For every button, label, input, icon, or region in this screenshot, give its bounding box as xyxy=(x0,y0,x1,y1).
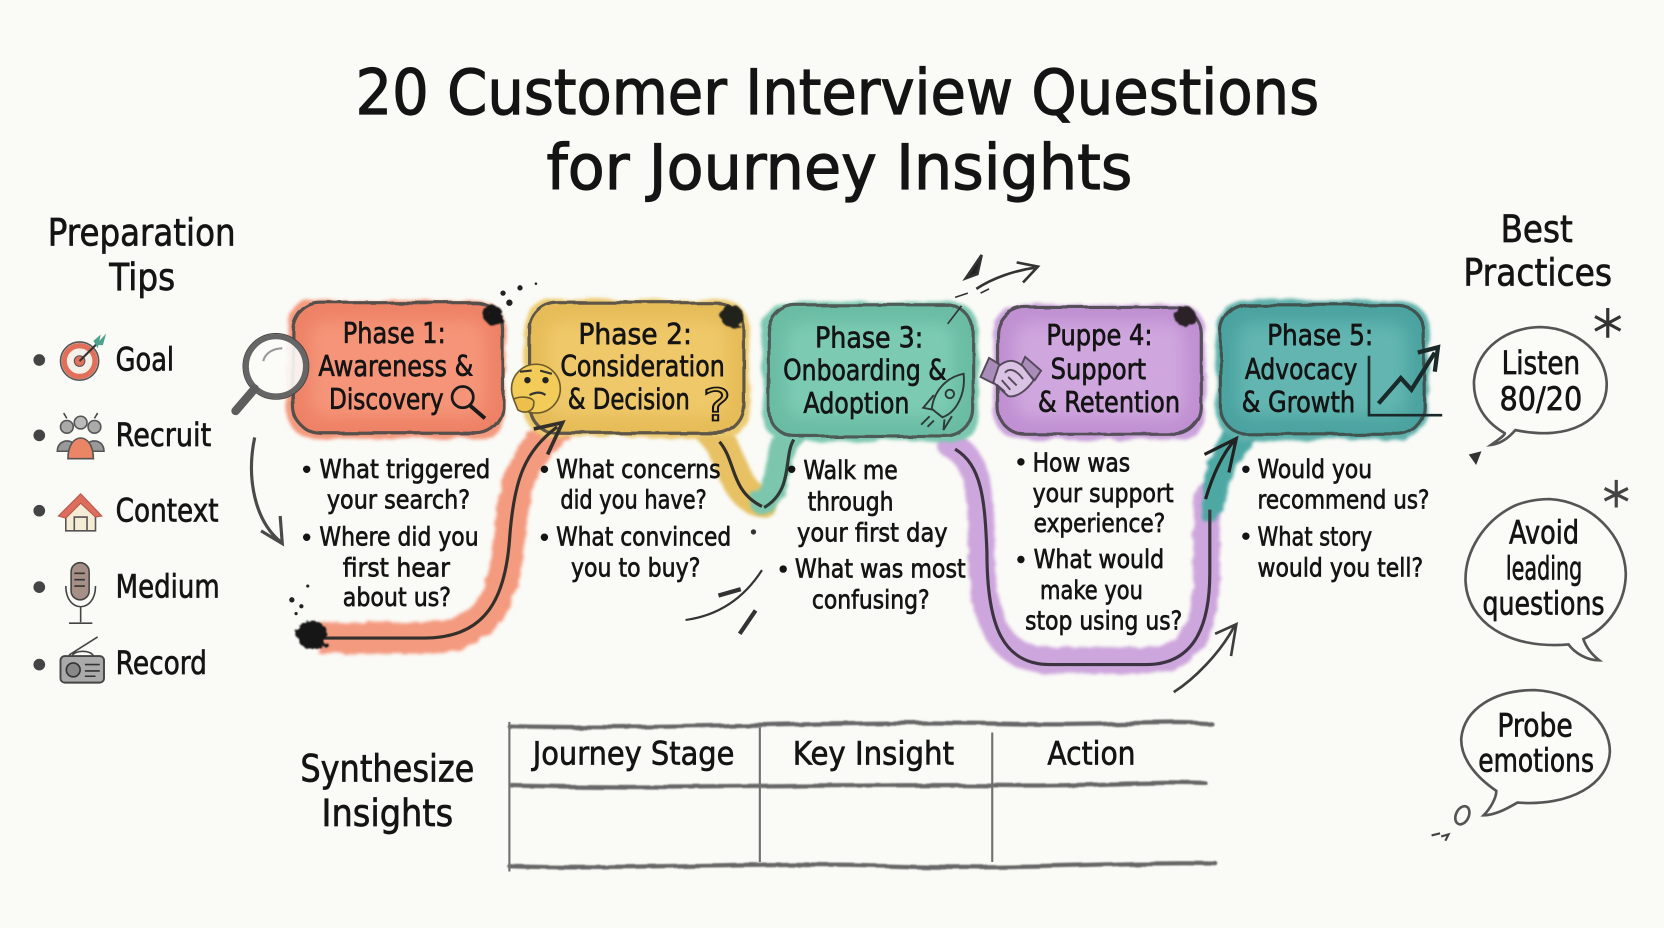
phase 3 panel xyxy=(762,302,978,442)
journey line: orange ribbon ink with arrowhead xyxy=(310,423,562,638)
heading: synthesize insights xyxy=(300,747,474,835)
questions: phase 1: your search? xyxy=(327,486,470,516)
panel: preparation tips xyxy=(33,211,236,683)
ribbon: orange xyxy=(318,425,562,638)
callout: avoid leading questions: leading xyxy=(1506,550,1582,588)
title xyxy=(356,56,1319,204)
questions: phase 4: experience? xyxy=(1034,509,1165,539)
phase 4 panel: Support xyxy=(1051,352,1146,386)
tip: medium: Medium xyxy=(116,568,220,606)
panel: best practices xyxy=(1432,208,1628,841)
heading: best practices xyxy=(1463,208,1612,295)
heading: best practices: Practices xyxy=(1463,252,1612,295)
arrow: upper sketch xyxy=(948,255,1038,324)
table: synthesis grid: Key Insight xyxy=(793,734,954,772)
tip: record: Record xyxy=(116,644,207,682)
phase 5 panel: & Growth xyxy=(1242,385,1355,419)
questions: phase 1: about us? xyxy=(343,583,451,613)
icon: small magnifier xyxy=(452,387,485,418)
questions: phase 5 xyxy=(1242,455,1429,583)
tip: recruit: Recruit xyxy=(116,416,211,454)
phase 2 panel: & Decision xyxy=(568,382,690,416)
phase 5 panel: Advocacy xyxy=(1245,352,1357,386)
questions: phase 4: make you xyxy=(1040,576,1143,606)
journey line: yellow ribbon ink xyxy=(720,442,762,506)
questions: phase 5: would you tell? xyxy=(1258,553,1423,583)
phase 5 panel: Phase 5: xyxy=(1267,318,1373,352)
tip: context: Context xyxy=(116,491,219,529)
tip: context xyxy=(33,491,219,531)
questions: phase 2 xyxy=(541,455,731,583)
questions: phase 1: What triggered xyxy=(319,455,490,485)
journey ribbons: colour wash xyxy=(318,425,1268,660)
ribbon: purple xyxy=(950,444,1207,660)
callout: avoid leading questions xyxy=(1466,480,1628,660)
questions: phase 3 xyxy=(779,456,966,615)
callout: listen: Listen xyxy=(1502,344,1580,382)
tip: recruit xyxy=(33,413,211,459)
callout: avoid leading questions: Avoid xyxy=(1509,514,1579,552)
callout: probe emotions: emotions xyxy=(1478,742,1594,780)
journey line: arrow into phase 5 xyxy=(1204,439,1236,499)
questions: phase 4 xyxy=(1017,448,1182,637)
questions: phase 2: did you have? xyxy=(560,486,707,516)
phase 3 panel: Phase 3: xyxy=(815,320,923,354)
phase 4 panel xyxy=(993,304,1206,440)
phase 4 panel: Puppe 4: xyxy=(1046,318,1152,352)
phase 1 panel: Phase 1: xyxy=(343,316,446,350)
phase 3 panel: Onboarding & xyxy=(783,353,947,387)
questions: phase 4: your support xyxy=(1033,479,1174,509)
callout: avoid leading questions: questions xyxy=(1483,585,1605,623)
journey line: teal ribbon ink xyxy=(764,440,794,508)
arrow: lower sketch xyxy=(686,530,762,634)
ribbon: yellow xyxy=(709,429,762,501)
icon: thinking face xyxy=(512,364,560,413)
callout: probe emotions: Probe xyxy=(1497,707,1573,745)
phase 4 panel: & Retention xyxy=(1038,385,1180,419)
icon: growth chart xyxy=(1369,347,1442,415)
ink blob xyxy=(289,584,328,649)
questions: phase 3: Walk me xyxy=(803,456,898,486)
questions: phase 3: your first day xyxy=(797,518,948,548)
heading: best practices: Best xyxy=(1501,208,1573,251)
ribbon: teal xyxy=(762,433,794,501)
arrow: tips to phase 1 xyxy=(252,437,282,544)
questions: phase 1 xyxy=(303,455,490,613)
heading: preparation tips: Preparation xyxy=(48,211,236,254)
heading: preparation tips xyxy=(48,211,236,299)
callout: listen xyxy=(1469,308,1620,465)
icon: rocket xyxy=(921,374,964,430)
questions: phase 3: through xyxy=(808,488,894,518)
phase 2 panel: Phase 2: xyxy=(578,317,692,351)
callout: listen: 80/20 xyxy=(1500,380,1582,418)
tip: goal xyxy=(33,333,174,380)
phase 3 panel: Adoption xyxy=(803,386,909,420)
questions: phase 4: What would xyxy=(1034,545,1164,575)
table: synthesis grid: Journey Stage xyxy=(531,734,734,772)
questions: phase 2: What convinced xyxy=(556,523,731,553)
table: synthesis grid xyxy=(509,722,1216,872)
phase 2 panel xyxy=(524,300,749,437)
phase 1 panel: Discovery xyxy=(329,382,444,416)
questions: phase 1: Where did you xyxy=(319,523,479,553)
phase 5 panel xyxy=(1216,301,1442,440)
title: for Journey Insights xyxy=(547,131,1132,204)
phase 1 panel: Awareness & xyxy=(318,349,473,383)
questions: phase 1: first hear xyxy=(343,553,450,583)
tip: goal: Goal xyxy=(116,341,174,379)
heading: synthesize insights: Synthesize xyxy=(300,747,474,790)
heading: synthesize insights: Insights xyxy=(322,792,453,835)
phase 2 panel: Consideration xyxy=(560,349,725,383)
icon: question mark: ? xyxy=(703,379,731,431)
tip: medium xyxy=(33,563,220,623)
questions: phase 4: stop using us? xyxy=(1025,607,1182,637)
ribbon: teal to phase 5 xyxy=(1202,430,1268,522)
questions: phase 2: What concerns xyxy=(556,455,721,485)
questions: phase 3: What was most xyxy=(795,555,966,585)
table: synthesis grid: Action xyxy=(1047,734,1136,772)
heading: preparation tips: Tips xyxy=(108,256,175,299)
phase 1 panel xyxy=(287,282,537,439)
questions: phase 4: How was xyxy=(1033,448,1130,478)
icon: ink splatter xyxy=(500,282,537,306)
questions: phase 3: confusing? xyxy=(812,585,930,615)
questions: phase 5: recommend us? xyxy=(1258,486,1429,516)
journey line: purple ribbon ink xyxy=(955,449,1210,665)
callout: probe emotions xyxy=(1432,690,1610,841)
questions: phase 2: you to buy? xyxy=(571,553,700,583)
questions: phase 5: Would you xyxy=(1258,455,1372,485)
icon: handshake xyxy=(981,357,1041,396)
icon: large magnifier xyxy=(236,333,309,411)
questions: phase 5: What story xyxy=(1258,523,1372,553)
arrow: to phase 5 xyxy=(1174,624,1236,692)
tip: record xyxy=(33,637,207,683)
title: 20 Customer Interview Questions xyxy=(356,56,1319,129)
